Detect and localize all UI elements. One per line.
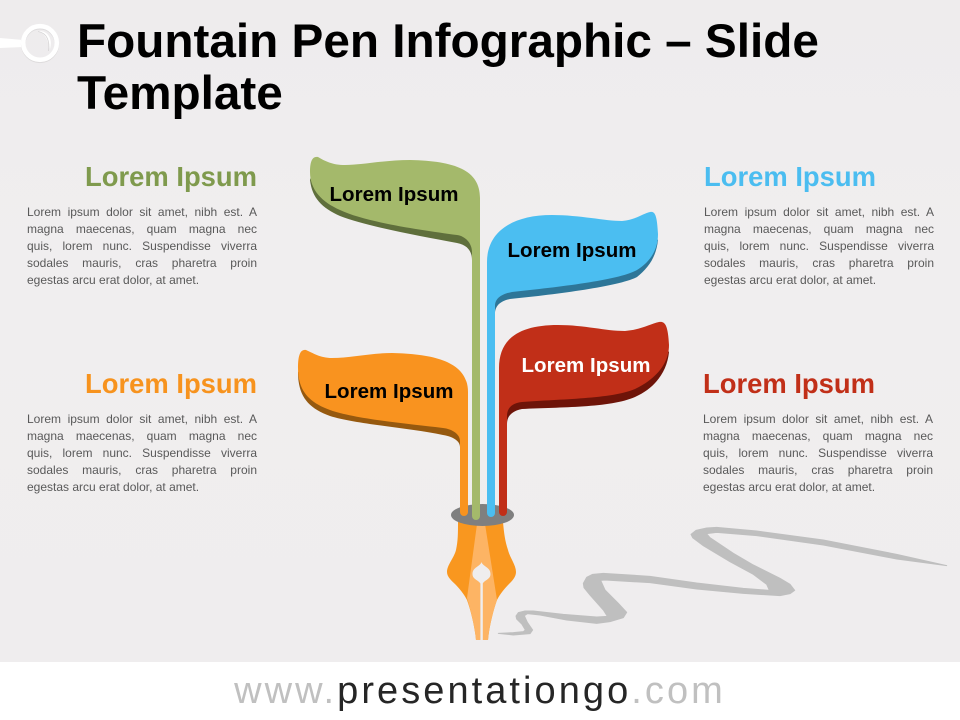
body text: orange: sodales mauris, cras pharetra proin [27, 463, 257, 477]
body text: orange: egestas arcu erat dolor, at amet. [27, 480, 199, 494]
flag: green [310, 157, 480, 520]
flag: blue [487, 212, 658, 517]
body text: red: Lorem ipsum dolor sit amet, nibh est. A [703, 412, 933, 426]
flag label: blue: Lorem Ipsum [508, 239, 636, 262]
text block: red bottom right [703, 368, 934, 494]
body text: green: sodales mauris, cras pharetra proin [27, 256, 257, 270]
pen nib [447, 504, 516, 640]
body text: blue: sodales mauris, cras pharetra proin [704, 256, 934, 270]
body text: green: quis, lorem nunc. Suspendisse viverra [27, 239, 257, 253]
body text: green [27, 205, 258, 287]
ink stroke [498, 527, 947, 635]
title: Template [77, 67, 283, 120]
heading: blue: Lorem Ipsum [704, 161, 876, 192]
title: Fountain Pen Infographic – Slide [77, 15, 819, 68]
flag label: red: Lorem Ipsum [522, 354, 650, 377]
footer website: www.presentationgo.com [234, 670, 726, 712]
body text: red: quis, lorem nunc. Suspendisse viverra [703, 446, 933, 460]
body text: orange: magna maecenas, quam magna nec [27, 429, 257, 443]
heading: green: Lorem Ipsum [85, 161, 257, 192]
text block: blue top right [704, 161, 934, 287]
body text: orange: quis, lorem nunc. Suspendisse viverra [27, 446, 257, 460]
body text: green: magna maecenas, quam magna nec [27, 222, 257, 236]
body text: red [703, 412, 934, 494]
heading: orange: Lorem Ipsum [85, 368, 257, 399]
flag: orange [298, 350, 468, 516]
body text: red: magna maecenas, quam magna nec [703, 429, 933, 443]
flag label: orange: Lorem Ipsum [324, 380, 454, 403]
body text: red: sodales mauris, cras pharetra proin [703, 463, 933, 477]
body text: orange: Lorem ipsum dolor sit amet, nibh est. A [27, 412, 257, 426]
body text: red: egestas arcu erat dolor, at amet. [703, 480, 875, 494]
body text: blue: quis, lorem nunc. Suspendisse viverra [704, 239, 934, 253]
flag label: green: Lorem Ipsum [330, 183, 458, 206]
title [77, 15, 819, 120]
body text: blue: egestas arcu erat dolor, at amet. [704, 273, 876, 287]
body text: blue [704, 205, 934, 287]
body text: green: Lorem ipsum dolor sit amet, nibh est. A [27, 205, 257, 219]
icon: title pin [0, 26, 57, 61]
flag: red [499, 322, 669, 516]
body text: blue: Lorem ipsum dolor sit amet, nibh est. A [704, 205, 934, 219]
body text: green: egestas arcu erat dolor, at amet. [27, 273, 199, 287]
body text: blue: magna maecenas, quam magna nec [704, 222, 934, 236]
body text: orange [27, 412, 258, 494]
text block: orange bottom left [27, 368, 258, 494]
text block: green top left [27, 161, 258, 287]
footer website [0, 662, 960, 720]
heading: red: Lorem Ipsum [703, 368, 875, 399]
